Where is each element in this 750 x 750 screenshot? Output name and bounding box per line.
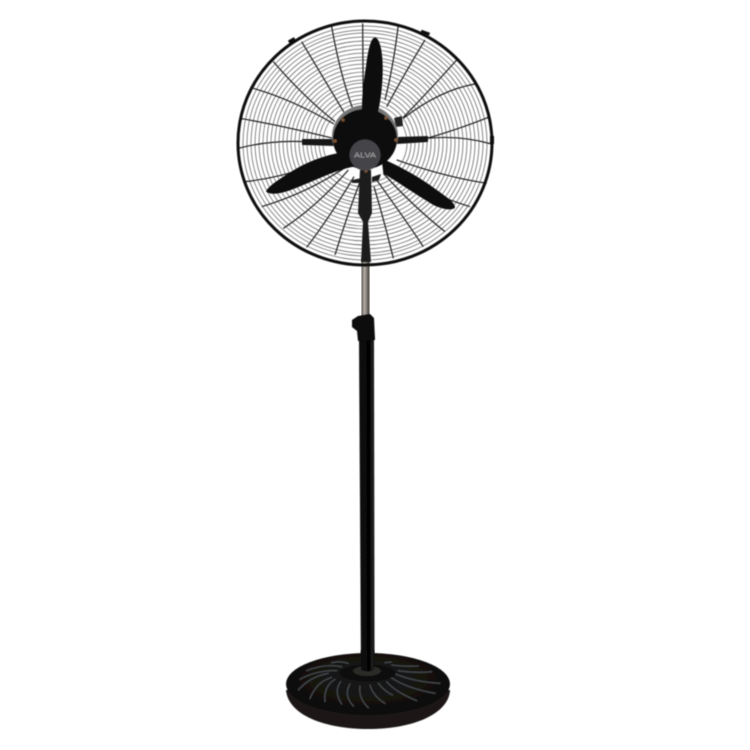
outer ring [238, 21, 492, 265]
base centre boss [340, 664, 396, 682]
fan blades [266, 37, 455, 209]
round fluted base [286, 650, 450, 729]
hub screws [333, 116, 398, 173]
motor housing rim [332, 105, 398, 167]
blade hub cap [350, 140, 380, 170]
base rim [286, 690, 450, 729]
height adjustment collar [352, 314, 375, 341]
concentric grill wires [243, 26, 487, 260]
cap logo: ALVA [354, 152, 376, 160]
pole foot [361, 650, 374, 672]
ring clips [288, 30, 494, 144]
curved grill spokes [238, 23, 492, 258]
rear stem behind grill [358, 170, 372, 262]
small bracket under hub [352, 174, 381, 183]
base top surface [286, 653, 450, 715]
fan head [238, 21, 494, 265]
side struts [302, 136, 428, 146]
strut bracket [394, 116, 403, 127]
top blade [362, 37, 383, 138]
base swirl flutes [298, 662, 440, 708]
left blade [266, 152, 353, 194]
right blade [382, 158, 455, 209]
black lower pole [359, 336, 374, 670]
chrome upper pole [362, 258, 370, 320]
motor hub [333, 109, 397, 169]
